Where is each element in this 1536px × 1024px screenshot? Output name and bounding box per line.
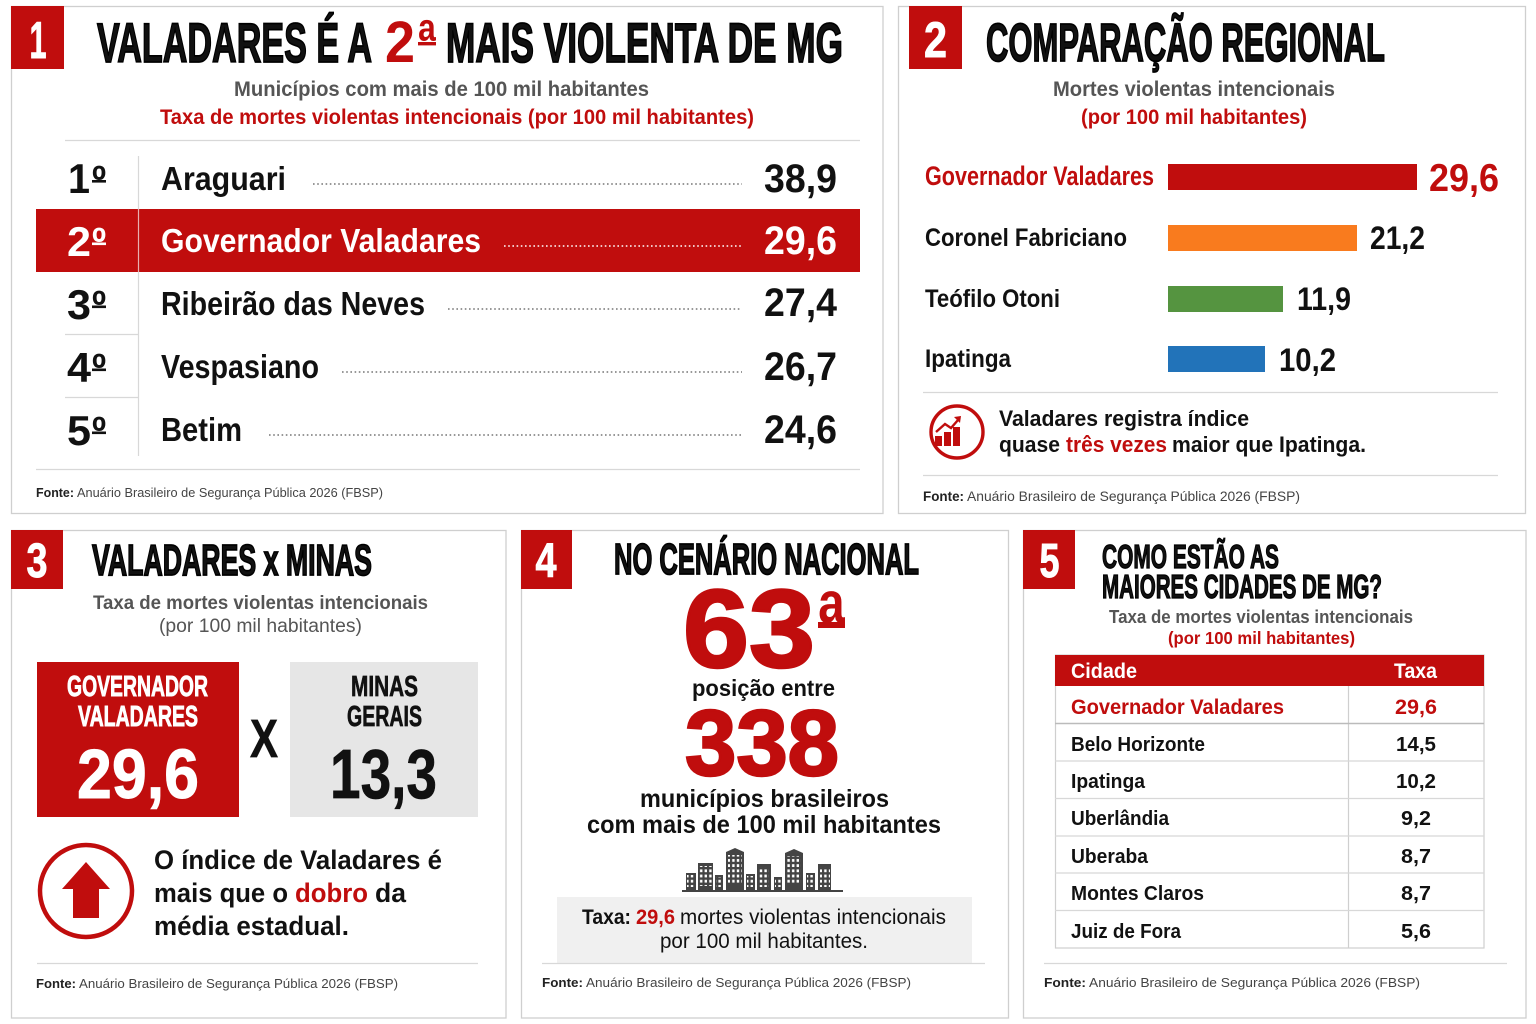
bar chart xyxy=(925,157,1499,378)
source: Anuário Brasileiro de Segurança Pública 2026 (FBSP) xyxy=(77,485,383,500)
row 5: º xyxy=(92,408,106,455)
row 1: Araguari xyxy=(161,160,286,197)
panel 1: ranking xyxy=(11,6,883,514)
row 3: 3 xyxy=(67,281,91,328)
subtitle: Taxa de mortes violentas intencionais xyxy=(1109,607,1413,627)
bar chart: Teófilo Otoni xyxy=(925,285,1060,313)
panel 3: Valadares x Minas xyxy=(11,530,506,1018)
source: Fonte: xyxy=(923,488,964,504)
subtitle: Mortes violentas intencionais xyxy=(1053,78,1335,101)
card: Minas Gerais xyxy=(290,662,478,817)
table: 10,2 xyxy=(1396,771,1436,793)
panel 2: regional comparison xyxy=(898,6,1526,514)
callout text: três vezes xyxy=(1066,432,1167,457)
subtitle: Municípios com mais de 100 mil habitantes xyxy=(234,78,649,101)
callout text: dobro xyxy=(295,878,368,908)
icon: rising chart xyxy=(931,406,983,458)
table: Cidade xyxy=(1071,660,1137,683)
row 4: º xyxy=(92,345,106,392)
title: MAIS VIOLENTA DE MG xyxy=(446,11,843,74)
table: 5,6 xyxy=(1401,921,1431,943)
source: Anuário Brasileiro de Segurança Pública 2026 (FBSP) xyxy=(79,976,398,991)
callout text: média estadual. xyxy=(154,911,349,941)
row 5: 5 xyxy=(67,407,91,454)
row 1: º xyxy=(92,157,106,204)
bar chart: Coronel Fabriciano xyxy=(925,224,1127,252)
rate callout: por 100 mil habitantes. xyxy=(660,930,868,953)
source: Fonte: xyxy=(542,975,583,990)
title xyxy=(97,8,843,77)
source: Fonte: xyxy=(1044,975,1086,990)
row 5: 24,6 xyxy=(764,408,837,452)
table: Juiz de Fora xyxy=(1071,921,1182,943)
badge 2 xyxy=(909,6,962,69)
table: 8,7 xyxy=(1401,883,1431,905)
callout text: Valadares registra índice xyxy=(999,406,1249,431)
table: 29,6 xyxy=(1395,695,1437,719)
source: Fonte: xyxy=(36,485,74,500)
callout text xyxy=(154,845,442,941)
row 3: º xyxy=(92,282,106,329)
row 4: 4 xyxy=(67,344,92,391)
card: Governador Valadares: VALADARES xyxy=(78,701,198,733)
title: VALADARES x MINAS xyxy=(92,536,372,585)
red subtitle: (por 100 mil habitantes) xyxy=(1081,106,1307,129)
row 3: 27,4 xyxy=(764,281,838,325)
bar chart: 29,6 xyxy=(1429,157,1499,200)
total 338: 338 xyxy=(685,691,839,795)
table: Uberlândia xyxy=(1071,808,1170,830)
row 2: Governador Valadares xyxy=(161,222,481,259)
row 4: Vespasiano xyxy=(161,348,319,385)
row 1 xyxy=(68,155,837,204)
card: Governador Valadares xyxy=(37,662,239,817)
position label: posição entre xyxy=(692,675,835,701)
callout text: mais que o xyxy=(154,878,288,908)
row 2 xyxy=(67,218,837,266)
row 4: 26,7 xyxy=(764,345,837,389)
badge 4 xyxy=(521,530,572,589)
row 2: 29,6 xyxy=(764,219,837,263)
card: Governador Valadares: 29,6 xyxy=(77,735,199,813)
description: municípios brasileiros xyxy=(640,785,889,813)
rank 63ª: ª xyxy=(818,571,845,676)
title: COMO ESTÃO AS xyxy=(1102,538,1279,575)
badge 3 xyxy=(11,530,63,589)
versus X: X xyxy=(250,709,278,769)
table xyxy=(1055,655,1484,948)
table: Taxa xyxy=(1394,660,1437,683)
rate callout: mortes violentas intencionais xyxy=(680,906,946,929)
bar chart: Governador Valadares xyxy=(925,161,1154,191)
highlighted row background xyxy=(36,209,860,272)
rank 63ª: 63 xyxy=(683,568,815,691)
subtitle: Taxa de mortes violentas intencionais xyxy=(93,593,428,614)
source: Anuário Brasileiro de Segurança Pública 2026 (FBSP) xyxy=(1089,975,1420,990)
rate callout xyxy=(557,897,972,963)
title: VALADARES É A xyxy=(97,11,372,74)
icon: up arrow xyxy=(40,845,132,937)
row 1: 38,9 xyxy=(764,157,837,201)
description xyxy=(587,785,941,839)
rate callout: 29,6 xyxy=(636,906,675,929)
callout text: da xyxy=(375,878,407,908)
row 1: 1 xyxy=(68,155,90,202)
row 4 xyxy=(67,344,837,392)
rate callout: Taxa: xyxy=(582,906,631,929)
badge 1: 1 xyxy=(30,12,46,70)
bar chart: 10,2 xyxy=(1279,342,1336,378)
table: Belo Horizonte xyxy=(1071,734,1205,756)
row 2: º xyxy=(92,219,106,266)
row 5 xyxy=(67,407,837,455)
row 2: 2 xyxy=(67,218,91,265)
badge 5: 5 xyxy=(1040,535,1060,588)
card: Minas Gerais: MINAS xyxy=(351,671,418,703)
table: Montes Claros xyxy=(1071,883,1204,905)
subtitle units: (por 100 mil habitantes) xyxy=(159,616,362,637)
panel 4: national scenario xyxy=(521,530,1008,1018)
source: Fonte: xyxy=(36,976,76,991)
badge 3: 3 xyxy=(26,535,48,588)
bar chart: 11,9 xyxy=(1297,281,1351,317)
badge 5 xyxy=(1023,530,1075,589)
table: Uberaba xyxy=(1071,846,1149,868)
red subtitle: Taxa de mortes violentas intencionais (por 100 mil habitantes) xyxy=(160,106,754,129)
callout text: maior que Ipatinga. xyxy=(1172,432,1366,457)
callout text xyxy=(999,406,1366,457)
callout text: O índice de Valadares é xyxy=(154,845,442,875)
bar chart: Ipatinga xyxy=(925,345,1012,373)
title: ª xyxy=(418,8,436,77)
badge 2: 2 xyxy=(924,12,947,68)
badge 4: 4 xyxy=(536,535,557,588)
bar chart: 21,2 xyxy=(1370,220,1425,256)
row 3: Ribeirão das Neves xyxy=(161,285,425,322)
row 5: Betim xyxy=(161,411,242,448)
table: 9,2 xyxy=(1401,808,1431,830)
title: NO CENÁRIO NACIONAL xyxy=(614,534,919,584)
card: Minas Gerais: GERAIS xyxy=(347,701,422,733)
source: Anuário Brasileiro de Segurança Pública 2026 (FBSP) xyxy=(967,488,1300,504)
icon: city skyline xyxy=(682,848,843,892)
table: Governador Valadares xyxy=(1071,696,1284,719)
title xyxy=(1102,538,1382,605)
source: Anuário Brasileiro de Segurança Pública 2026 (FBSP) xyxy=(586,975,911,990)
table: 14,5 xyxy=(1396,734,1436,756)
panel 5: largest cities table xyxy=(1023,530,1526,1018)
title: 2 xyxy=(385,10,415,75)
card: Governador Valadares: GOVERNADOR xyxy=(67,671,208,703)
callout text: quase xyxy=(999,432,1060,457)
row 3 xyxy=(67,281,838,329)
table: 8,7 xyxy=(1401,846,1431,868)
card: Minas Gerais: 13,3 xyxy=(330,735,437,813)
description: com mais de 100 mil habitantes xyxy=(587,811,941,839)
table: Ipatinga xyxy=(1071,771,1146,793)
red subtitle: (por 100 mil habitantes) xyxy=(1168,628,1355,648)
badge 1 xyxy=(11,6,64,70)
